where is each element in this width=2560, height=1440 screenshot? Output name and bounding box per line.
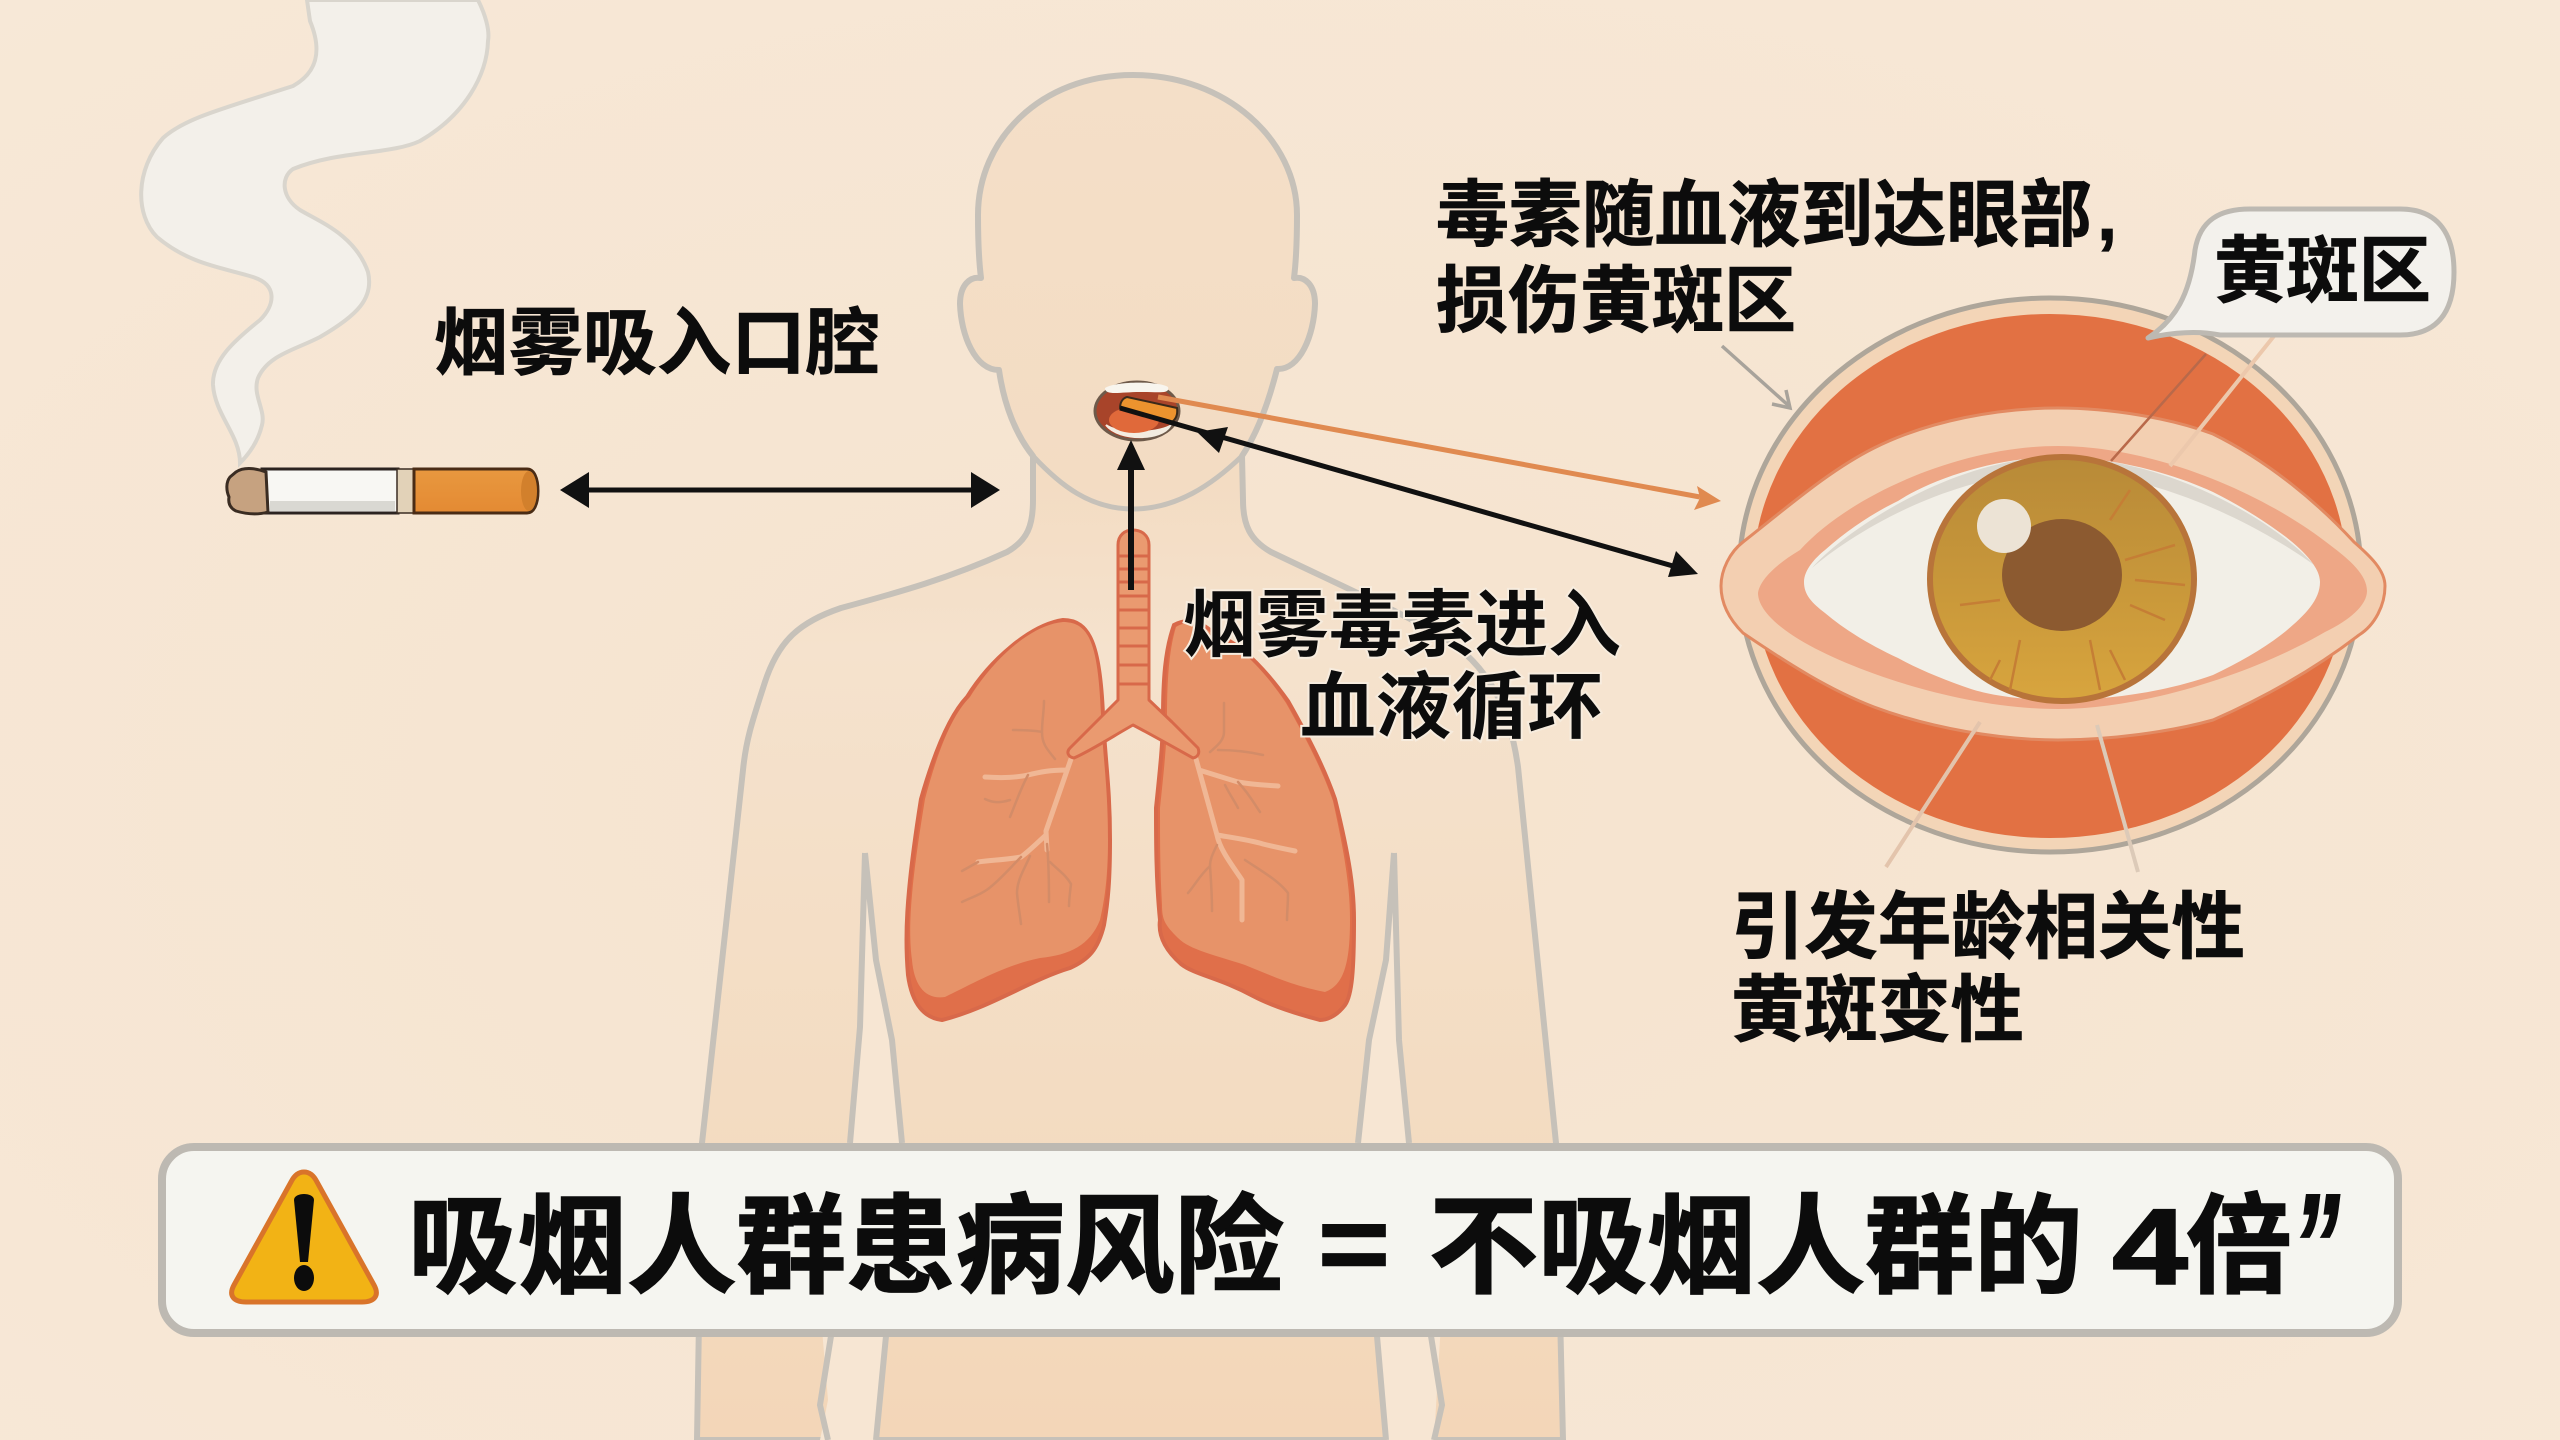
label: toxins reach the eye: 损伤黄斑区 <box>1436 261 1796 342</box>
iris <box>1930 457 2194 701</box>
orange retina tissue <box>1753 314 2347 838</box>
upper teeth <box>1105 383 1168 393</box>
cigarette paper <box>262 469 398 513</box>
arrow: toxins from lungs up to mouth <box>1117 440 1145 590</box>
label: toxins reach the eye <box>1436 175 2117 342</box>
sclera <box>1804 457 2320 700</box>
eyelid band <box>1721 408 2385 740</box>
cigarette filter <box>414 469 538 513</box>
label: toxins reach the eye: , <box>2097 175 2117 256</box>
callout bubble: 黄斑区 <box>2148 209 2454 338</box>
pupil <box>2002 519 2122 631</box>
eye diagram <box>1721 298 2385 872</box>
banner text: = <box>1318 1183 1390 1304</box>
arrow: black double route between mouth and eye <box>1120 408 1698 577</box>
cigarette <box>227 469 538 514</box>
icon: warning triangle <box>232 1172 376 1302</box>
leader lines to disease label <box>1886 722 1980 867</box>
lungs <box>906 620 1354 1020</box>
mouth cross-section <box>1095 382 1179 440</box>
smoke plume <box>141 0 488 463</box>
eyeball outer ring <box>1739 298 2361 852</box>
label: causes age-related macular degeneration: 黄斑变性 <box>1731 970 2024 1051</box>
label: toxins enter blood circulation: 血液循环 <box>1300 667 1603 748</box>
tongue <box>1109 407 1159 433</box>
leader lines at macula <box>2170 321 2286 466</box>
banner text <box>408 1162 2340 1330</box>
iris fibres <box>1960 490 2185 690</box>
label: causes age-related macular degeneration <box>1731 887 2245 1051</box>
bronchial tree right <box>1188 703 1295 920</box>
label: toxins enter blood circulation <box>1183 585 1621 748</box>
inner lid <box>1758 446 2367 709</box>
banner text: 4 <box>2112 1186 2188 1307</box>
bronchial tree left <box>962 701 1071 924</box>
banner text: 不吸烟人群的 <box>1429 1186 2083 1307</box>
risk banner <box>162 1147 2398 1333</box>
label: causes age-related macular degeneration: 引发年龄相关性 <box>1731 887 2245 968</box>
arrow: smoke inhaled (double-headed) <box>560 472 1000 508</box>
left lung <box>906 620 1110 1020</box>
orange bar of smoke <box>1120 397 1177 423</box>
right lung <box>1156 621 1354 1020</box>
filter tipping band <box>397 469 414 513</box>
trachea and main bronchi <box>1068 530 1199 758</box>
arrow: orange toxin route from mouth to eye <box>1158 397 1721 510</box>
label: toxins enter blood circulation: 烟雾毒素进入 <box>1183 585 1621 666</box>
sclera top shadow <box>1812 457 2314 568</box>
lower teeth <box>1106 425 1170 437</box>
label: smoke inhaled: 烟雾吸入口腔 <box>434 303 880 384</box>
callout bubble: 黄斑区: 黄斑区 <box>2214 231 2431 312</box>
banner text: ” <box>2292 1162 2340 1330</box>
banner text: 吸烟人群患病风险 <box>408 1186 1284 1307</box>
highlight <box>1977 499 2031 553</box>
label: toxins reach the eye: 毒素随血液到达眼部 <box>1436 175 2092 256</box>
burnt ash tip <box>227 469 268 514</box>
grey pointer to eyeball <box>1722 346 1790 408</box>
banner text: 倍 <box>2186 1186 2292 1307</box>
human body silhouette <box>697 75 1563 1440</box>
